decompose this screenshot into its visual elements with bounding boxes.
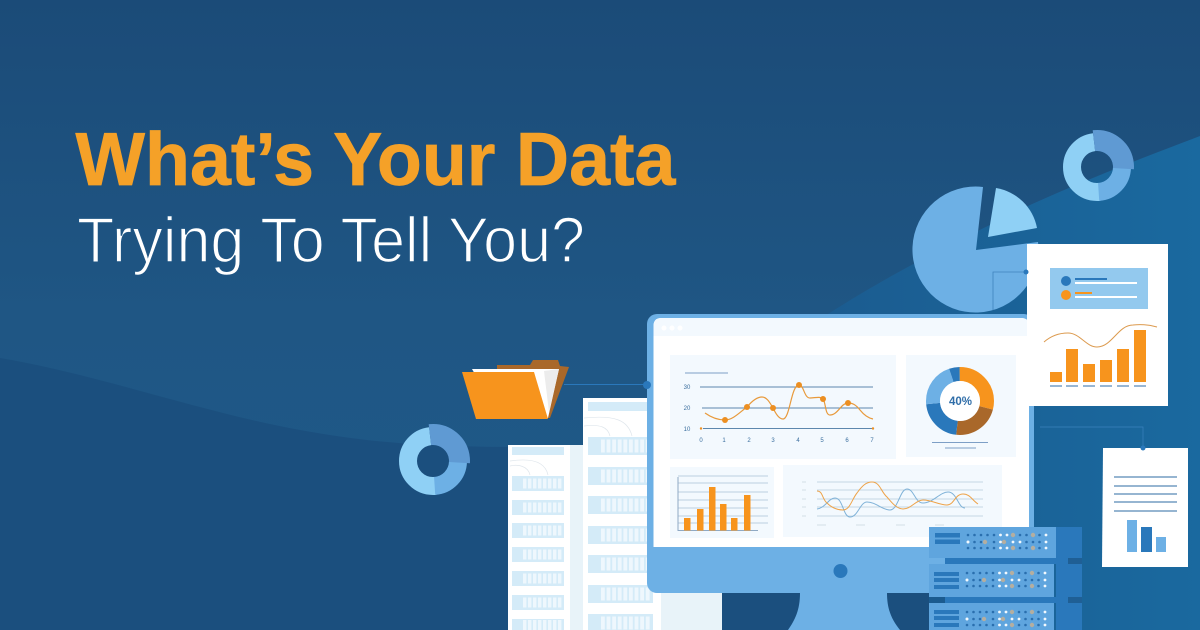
connector: folder to monitor bbox=[564, 384, 735, 386]
server unit 1 bbox=[929, 527, 1056, 558]
orange series bbox=[817, 482, 978, 510]
axis labels bbox=[684, 385, 874, 444]
panel: bar chart bbox=[670, 467, 774, 538]
connector node: pie to report bbox=[1024, 270, 1028, 274]
title bbox=[76, 117, 677, 276]
monitor stand bbox=[788, 593, 900, 630]
panel: line chart bbox=[670, 355, 896, 459]
panel: donut chart bbox=[906, 355, 1016, 457]
axis labels: 30 bbox=[684, 385, 691, 391]
line series bbox=[705, 385, 873, 420]
axis labels: 6 bbox=[845, 438, 849, 444]
axis labels: 0 bbox=[699, 438, 703, 444]
axis labels: 20 bbox=[684, 406, 691, 412]
server unit 2 bbox=[929, 564, 1054, 597]
axis labels: 5 bbox=[820, 438, 824, 444]
axis labels: 2 bbox=[747, 438, 751, 444]
donut icon: top right bbox=[1068, 138, 1126, 196]
title line 2: Trying To Tell You? bbox=[77, 204, 585, 276]
dot: connector node on monitor bbox=[643, 381, 651, 389]
axis labels: 10 bbox=[684, 427, 691, 433]
axis labels: 3 bbox=[771, 438, 775, 444]
legend box bbox=[1050, 268, 1148, 309]
connector: monitor to small document bbox=[1040, 427, 1143, 448]
pie chart icon bbox=[912, 187, 1038, 313]
report bars bbox=[1050, 330, 1146, 382]
document: back paper bbox=[583, 398, 722, 630]
document: right report bbox=[1027, 244, 1168, 406]
blue series bbox=[817, 489, 965, 517]
server rack bbox=[929, 527, 1082, 630]
panel: multi-line chart bbox=[783, 465, 1002, 537]
donut value: 40% bbox=[949, 396, 972, 408]
title line 1: What’s Your Data bbox=[76, 117, 677, 201]
monitor power button bbox=[834, 564, 848, 578]
document: small report bbox=[1102, 446, 1188, 567]
server unit 3 bbox=[929, 603, 1054, 630]
axis labels: 1 bbox=[722, 438, 726, 444]
icon: folder bbox=[462, 360, 569, 419]
axis labels: 4 bbox=[796, 438, 800, 444]
document: left stacked paper bbox=[508, 445, 584, 630]
monitor bbox=[647, 314, 1034, 593]
axis labels: 7 bbox=[870, 438, 874, 444]
donut icon: left bbox=[404, 432, 462, 490]
